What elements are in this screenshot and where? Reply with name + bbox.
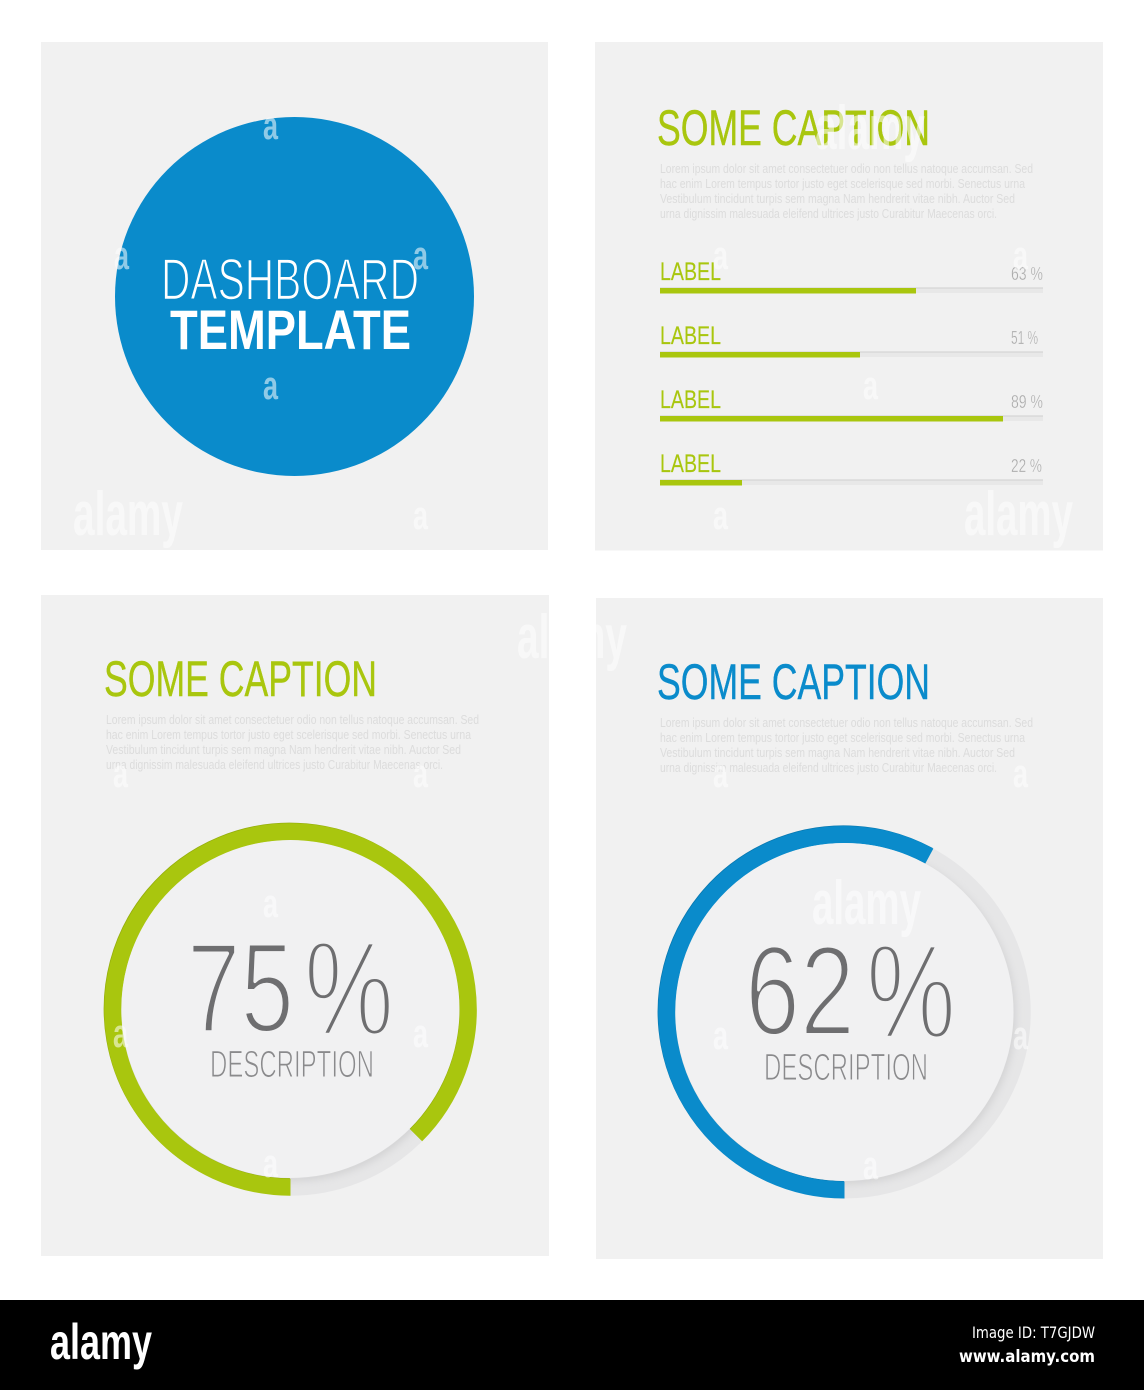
body text: [660, 162, 1033, 221]
watermarks: alamy: [73, 480, 183, 549]
body text: Vestibulum tincidunt turpis sem magna Nam hendrerit vitae nibh. Auctor Sed: [106, 743, 461, 757]
watermarks: a: [713, 752, 729, 796]
heading: some caption green: SOME CAPTION: [657, 100, 930, 156]
footer bar: [0, 1300, 1144, 1390]
panel: dashboard title: [41, 42, 548, 550]
bar row: 22%: [660, 450, 1043, 486]
bar row: 63%: 63 %: [1011, 264, 1043, 284]
bar row: 63%: LABEL: [660, 258, 721, 286]
watermarks: a: [713, 1014, 729, 1058]
value: 75 percent: [187, 913, 394, 1064]
watermarks: a: [413, 1012, 429, 1056]
body text: Lorem ipsum dolor sit amet consectetuer odio non tellus natoque accumsan. Sed: [106, 713, 479, 727]
watermarks: alamy: [964, 480, 1073, 549]
bar row: 89%: 89 %: [1011, 392, 1043, 412]
bar row: 22%: LABEL: [660, 450, 721, 478]
bar row: 89%: [660, 386, 1043, 422]
watermarks: a: [263, 882, 279, 926]
image id: Image ID: T7GJDW: [972, 1323, 1095, 1342]
description: DESCRIPTION: [764, 1047, 928, 1089]
watermarks: a: [113, 752, 129, 796]
body text: Vestibulum tincidunt turpis sem magna Nam hendrerit vitae nibh. Auctor Sed: [660, 746, 1015, 760]
watermarks: a: [863, 1144, 879, 1188]
website: www.alamy.com: [959, 1347, 1095, 1367]
watermarks: a: [114, 234, 130, 278]
body text: hac enim Lorem tempus tortor justo eget scelerisque sed morbi. Senectus urna: [660, 731, 1025, 745]
watermarks: a: [413, 234, 429, 278]
value: 75 percent: 75: [187, 917, 294, 1060]
blue circle: [115, 117, 474, 476]
title: dashboard: DASHBOARD: [161, 248, 419, 312]
panel: 75 percent gauge: [41, 595, 549, 1256]
watermarks: a: [413, 494, 429, 538]
watermarks: a: [263, 1142, 279, 1186]
bar row: 63%: [660, 258, 1043, 294]
bar row: 51%: [660, 322, 1043, 358]
watermarks: a: [113, 1012, 129, 1056]
bar row: 22%: 22 %: [1011, 456, 1042, 476]
description: DESCRIPTION: [210, 1044, 374, 1086]
watermarks: a: [1013, 1014, 1029, 1058]
watermarks: a: [713, 494, 729, 538]
body text: urna dignissim malesuada eleifend ultrices justo Curabitur Maecenas orci.: [660, 207, 997, 221]
watermarks: a: [1013, 752, 1029, 796]
watermarks: a: [413, 752, 429, 796]
watermarks: [73, 94, 1073, 1188]
value: 62 percent: %: [866, 916, 956, 1067]
body text: hac enim Lorem tempus tortor justo eget scelerisque sed morbi. Senectus urna: [660, 177, 1025, 191]
body text: Lorem ipsum dolor sit amet consectetuer odio non tellus natoque accumsan. Sed: [660, 162, 1033, 176]
watermarks: alamy: [812, 869, 921, 938]
watermarks: a: [263, 364, 279, 408]
body text: [106, 713, 479, 772]
body text: Lorem ipsum dolor sit amet consectetuer odio non tellus natoque accumsan. Sed: [660, 716, 1033, 730]
gauge ring: 62: [666, 834, 1022, 1190]
heading: some caption green: SOME CAPTION: [104, 651, 377, 707]
watermarks: alamy: [517, 603, 627, 672]
value: 75 percent: %: [304, 913, 394, 1064]
watermarks: a: [1013, 234, 1029, 278]
body text: [660, 716, 1033, 775]
body text: hac enim Lorem tempus tortor justo eget scelerisque sed morbi. Senectus urna: [106, 728, 471, 742]
watermarks: a: [863, 364, 879, 408]
value: 62 percent: 62: [745, 920, 855, 1063]
panel: 62 percent gauge: [596, 598, 1103, 1259]
watermarks: a: [263, 104, 279, 148]
title: template: TEMPLATE: [170, 298, 411, 361]
heading: some caption blue: SOME CAPTION: [657, 654, 930, 710]
watermarks: a: [713, 234, 729, 278]
gauge ring: 75: [112, 831, 468, 1187]
body text: urna dignissim malesuada eleifend ultrices justo Curabitur Maecenas orci.: [106, 758, 443, 772]
value: 62 percent: [745, 916, 956, 1067]
body text: urna dignissim malesuada eleifend ultrices justo Curabitur Maecenas orci.: [660, 761, 997, 775]
footer logo: alamy: [50, 1314, 152, 1370]
bar row: 51%: LABEL: [660, 322, 721, 350]
panel: bars: [595, 42, 1103, 550]
body text: Vestibulum tincidunt turpis sem magna Nam hendrerit vitae nibh. Auctor Sed: [660, 192, 1015, 206]
bar row: 89%: LABEL: [660, 386, 721, 414]
watermarks: alamy: [815, 94, 925, 163]
bar row: 51%: 51 %: [1011, 328, 1038, 348]
